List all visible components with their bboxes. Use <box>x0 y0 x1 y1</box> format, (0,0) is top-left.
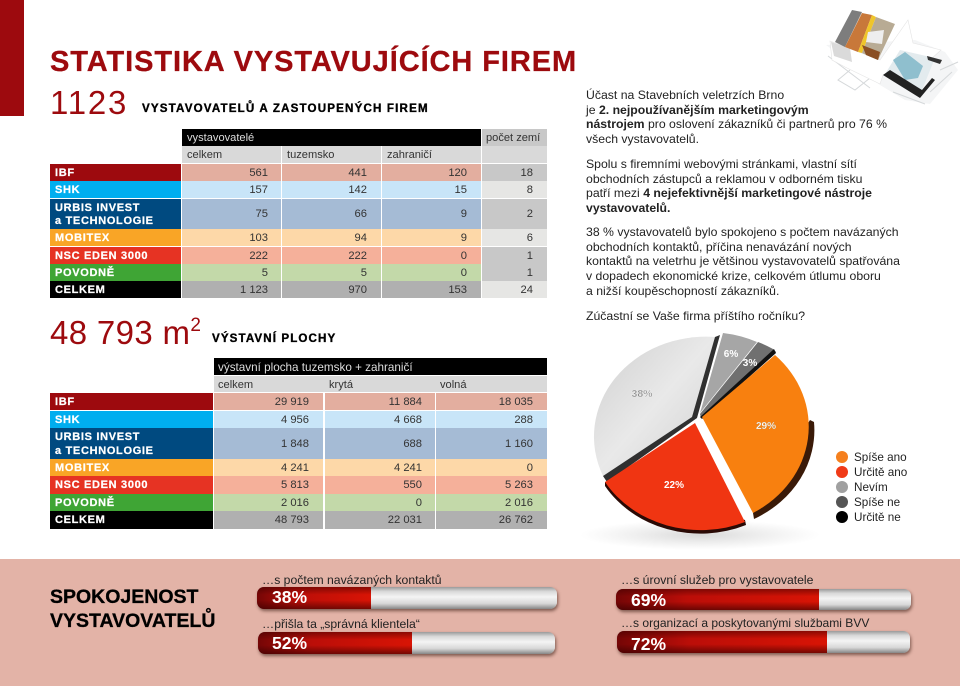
row: IBF <box>50 393 547 410</box>
row: IBF: 120 <box>448 166 467 178</box>
bar: 69%: 69% <box>631 590 666 610</box>
row: SHK: 15 <box>455 184 467 196</box>
bar label: contacts: …s počtem navázaných kontaktů <box>262 573 442 587</box>
row: POVODNĚ: 1 <box>527 266 533 278</box>
row: CELKEM: CELKEM <box>55 514 106 526</box>
row: SHK: SHK <box>55 414 80 426</box>
row: IBF: 11 884 <box>389 396 422 408</box>
row: SHK <box>50 181 547 198</box>
row: MOBITEX: MOBITEX <box>55 462 110 474</box>
slice: 6%: 6% <box>724 349 738 360</box>
legend item: Nevím: Nevím <box>854 481 888 494</box>
slice: 3% <box>700 342 776 419</box>
row: NSC EDEN 3000: 222 <box>249 250 268 262</box>
bar: 72% <box>617 631 910 653</box>
text block: question: Zúčastní se Vaše firma příštího ročníku? <box>586 309 805 323</box>
text block: marketing tools: vystavovatelů. <box>586 201 670 215</box>
row: URBIS INVEST: 1 848 <box>281 438 309 450</box>
row: CELKEM: 24 <box>521 284 533 296</box>
row: POVODNĚ <box>50 494 547 511</box>
slice: 6% <box>700 333 757 413</box>
row: URBIS INVEST: URBIS INVEST <box>55 431 140 443</box>
row: CELKEM <box>50 281 547 298</box>
bar label: clientele: …přišla ta „správná klientela“ <box>262 617 420 631</box>
panel heading: SPOKOJENOST <box>50 586 198 608</box>
panel: satisfaction <box>0 559 960 686</box>
row: POVODNĚ: POVODNĚ <box>55 497 115 509</box>
row: NSC EDEN 3000: NSC EDEN 3000 <box>55 250 148 262</box>
row: IBF: 561 <box>249 166 268 178</box>
sub header: volná <box>435 376 547 392</box>
row: URBIS INVEST: 66 <box>355 208 367 220</box>
row: URBIS INVEST: 9 <box>461 208 467 220</box>
row: IBF: 18 035 <box>499 396 533 408</box>
row: MOBITEX: MOBITEX <box>55 232 110 244</box>
row: NSC EDEN 3000 <box>50 476 547 494</box>
heading: exhibitors: VYSTAVOVATELŮ A ZASTOUPENÝCH FIREM <box>142 102 429 115</box>
text block: participation: je 2. nejpoužívanějším marketingovým <box>586 103 809 117</box>
row: SHK: 4 956 <box>281 414 309 426</box>
row: IBF: 18 <box>521 166 533 178</box>
text block: participation: všech vystavovatelů. <box>586 132 699 146</box>
text block: contacts: a nižší koupěschopností zákazníků. <box>586 284 779 298</box>
legend item: Určitě ano: Určitě ano <box>854 466 907 479</box>
row: MOBITEX: 6 <box>527 232 533 244</box>
row: URBIS INVEST <box>50 428 547 459</box>
row: NSC EDEN 3000: NSC EDEN 3000 <box>55 479 148 491</box>
bar label: services: …s úrovní služeb pro vystavovatele <box>621 573 813 587</box>
bar: 38% <box>257 587 557 609</box>
row: NSC EDEN 3000: 222 <box>348 250 367 262</box>
slice: 29% orange <box>702 355 814 519</box>
big number: exhibitors: 1123 <box>50 84 128 121</box>
heading: exhibition area: VÝSTAVNÍ PLOCHY <box>212 332 336 345</box>
row: URBIS INVEST: a TECHNOLOGIE <box>55 444 154 456</box>
row: POVODNĚ: 0 <box>416 496 422 508</box>
bar label: organisation: …s organizací a poskytovanými službami BVV <box>621 616 869 630</box>
bar: 52%: 52% <box>272 633 307 653</box>
sub header: zahraničí: zahraničí <box>387 149 432 161</box>
row: URBIS INVEST: a TECHNOLOGIE <box>55 215 154 227</box>
row: POVODNĚ <box>50 264 547 281</box>
bar: 52% <box>258 632 555 654</box>
row: POVODNĚ: 5 <box>262 266 268 278</box>
row: CELKEM <box>50 511 547 529</box>
row: URBIS INVEST: URBIS INVEST <box>55 202 140 214</box>
sub header: celkem <box>214 376 324 392</box>
sub header: zahraničí <box>382 146 481 163</box>
table header: počet zemí <box>482 129 547 146</box>
table header: vystavovatelé <box>182 129 481 146</box>
row: MOBITEX: 4 241 <box>394 462 422 474</box>
row: POVODNĚ: 5 <box>361 266 367 278</box>
legend item: Spíše ano: Spíše ano <box>854 451 907 464</box>
sub header: volná: volná <box>440 379 467 391</box>
row: NSC EDEN 3000: 1 <box>527 250 533 262</box>
row: POVODNĚ: 2 016 <box>281 496 309 508</box>
row: MOBITEX: 94 <box>355 232 367 244</box>
text block: participation: nástrojem pro oslovení zákazníků či partnerů pro 76 % <box>586 117 887 131</box>
row: SHK: 288 <box>514 414 533 426</box>
row: URBIS INVEST: 1 160 <box>505 438 533 450</box>
row: IBF: IBF <box>55 167 75 179</box>
corner accent bar <box>0 0 24 116</box>
row: IBF: 441 <box>348 166 367 178</box>
row: NSC EDEN 3000 <box>50 247 547 264</box>
text block: contacts: 38 % vystavovatelů bylo spokojeno s počtem navázaných <box>586 225 899 239</box>
row: SHK: 157 <box>249 184 268 196</box>
row: MOBITEX: 103 <box>249 232 268 244</box>
panel heading: VYSTAVOVATELŮ <box>50 610 215 632</box>
row: URBIS INVEST <box>50 199 547 229</box>
row: MOBITEX <box>50 459 547 476</box>
text block: marketing tools <box>586 157 872 215</box>
big number: exhibition area: 48 793 m2 <box>50 314 201 351</box>
row: CELKEM: 153 <box>448 284 467 296</box>
row: CELKEM: 48 793 <box>275 514 309 526</box>
row: IBF: 29 919 <box>275 396 309 408</box>
legend item: Určitě ne: Určitě ne <box>854 511 901 524</box>
row: URBIS INVEST: 688 <box>403 438 422 450</box>
row: MOBITEX: 9 <box>461 232 467 244</box>
row: SHK: 142 <box>348 184 367 196</box>
row: NSC EDEN 3000: 5 263 <box>505 479 533 491</box>
title: STATISTIKA VYSTAVUJÍCÍCH FIREM <box>50 46 577 78</box>
icon: house cutaway illustration <box>826 10 958 104</box>
text block: marketing tools: patří mezi 4 nejefektivnější marketingové nástroje <box>586 186 872 200</box>
row: NSC EDEN 3000: 5 813 <box>281 479 309 491</box>
table header: počet zemí: počet zemí <box>486 132 540 144</box>
text block: contacts: kontaktů na veletrhu je většinou vystavovatelů spatřována <box>586 254 900 268</box>
text block: contacts: obchodních kontaktů, příčina nenavázání nových <box>586 240 852 254</box>
row: CELKEM: 1 123 <box>240 284 268 296</box>
sub header: empty <box>482 146 547 163</box>
sub header: krytá: krytá <box>329 379 353 391</box>
sub header: krytá <box>324 376 435 392</box>
sub header: celkem: celkem <box>218 379 253 391</box>
bar: 69% <box>616 589 911 610</box>
legend <box>836 451 907 524</box>
slice: 3%: 3% <box>743 358 757 369</box>
panel heading <box>50 586 215 632</box>
table header: vystavovatelé: vystavovatelé <box>187 132 254 144</box>
slice: 38% light grey: 38% <box>631 388 653 400</box>
row: MOBITEX: 0 <box>527 462 533 474</box>
row: IBF: IBF <box>55 396 75 408</box>
text block: participation <box>586 88 887 146</box>
table: exhibitors <box>50 129 547 298</box>
text block: participation: Účast na Stavebních veletrzích Brno <box>586 88 784 102</box>
sub header: tuzemsko <box>282 146 381 163</box>
row: SHK: 8 <box>527 184 533 196</box>
bar: 38%: 38% <box>272 587 307 607</box>
row: CELKEM: 26 762 <box>499 514 533 526</box>
row: MOBITEX: 4 241 <box>281 462 309 474</box>
row: NSC EDEN 3000: 0 <box>461 250 467 262</box>
row: URBIS INVEST: 75 <box>256 208 268 220</box>
slice: 22% red <box>605 423 746 534</box>
sub header: tuzemsko: tuzemsko <box>287 149 334 161</box>
sub header: celkem <box>182 146 281 163</box>
legend item: Nevím <box>836 481 888 494</box>
row: POVODNĚ: 0 <box>461 266 467 278</box>
table header: výstavní plocha <box>214 358 547 375</box>
pie shadow <box>580 520 820 550</box>
row: IBF <box>50 164 547 181</box>
row: MOBITEX <box>50 229 547 246</box>
row: CELKEM: 970 <box>348 284 367 296</box>
sub header: celkem: celkem <box>187 149 222 161</box>
row: NSC EDEN 3000: 550 <box>403 479 422 491</box>
table header: výstavní plocha: výstavní plocha tuzemsko + zahraničí <box>218 361 413 374</box>
text block: marketing tools: Spolu s firemními webovými stránkami, vlastní sítí <box>586 157 857 171</box>
row: SHK: SHK <box>55 184 80 196</box>
text block: contacts <box>586 225 900 298</box>
row: POVODNĚ: POVODNĚ <box>55 267 115 279</box>
row: CELKEM: 22 031 <box>388 514 422 526</box>
row: CELKEM: CELKEM <box>55 284 106 296</box>
row: SHK <box>50 411 547 428</box>
slice: 22% red: 22% <box>664 480 684 491</box>
row: URBIS INVEST: 2 <box>527 208 533 220</box>
row: POVODNĚ: 2 016 <box>505 496 533 508</box>
legend item: Spíše ne: Spíše ne <box>854 496 900 509</box>
row: SHK: 4 668 <box>394 414 422 426</box>
chart: pie <box>594 333 814 546</box>
text block: contacts: v dopadech ekonomické krize, celkovém útlumu oboru <box>586 269 881 283</box>
table: exhibition area <box>50 358 547 529</box>
slice: 38% light grey <box>594 335 720 482</box>
slice: 29% orange: 29% <box>756 421 776 432</box>
text block: marketing tools: obchodních zástupců a reklamou v odborném tisku <box>586 172 862 186</box>
